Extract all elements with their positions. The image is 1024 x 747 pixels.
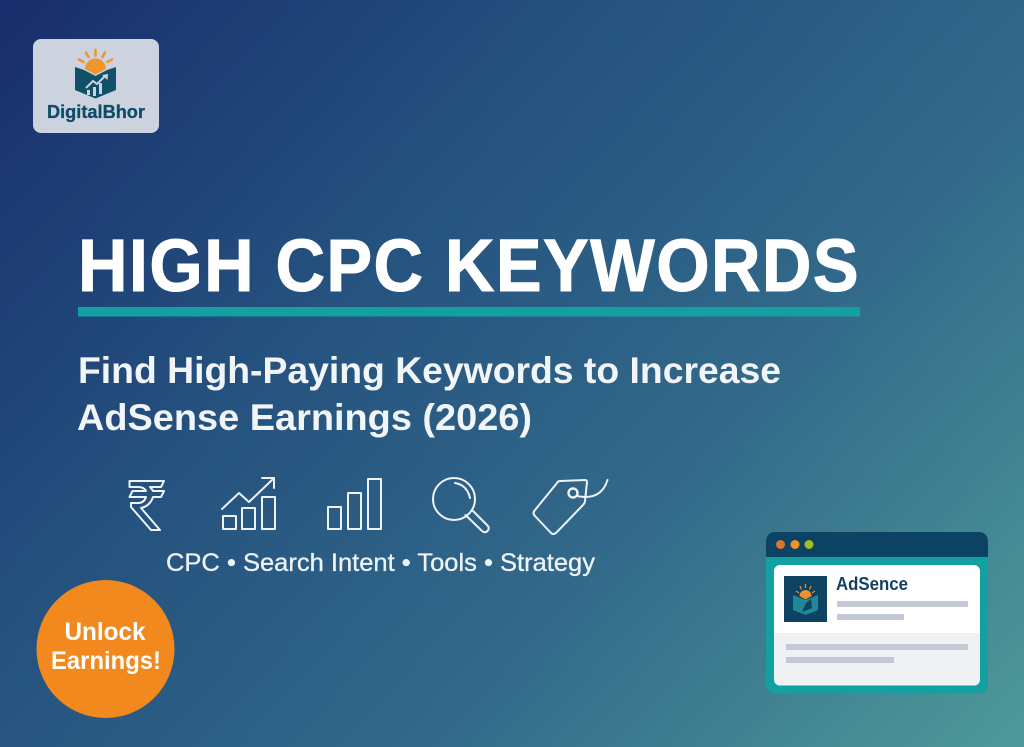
- icon: sun: [79, 50, 112, 74]
- icon: growth chart: [222, 478, 275, 529]
- icon captions: CPC • Search Intent • Tools • Strategy: [166, 549, 596, 577]
- window controls: [776, 540, 814, 549]
- badge: unlock earnings: [36, 580, 174, 718]
- card heading: AdSence: [836, 574, 908, 594]
- subtitle: Find High-Paying Keywords to Increase: [78, 350, 781, 391]
- browser window: AdSence: [766, 532, 988, 694]
- badge: unlock earnings: Unlock: [64, 618, 146, 646]
- logo wordmark: DigitalBhor: [47, 102, 145, 122]
- browser title bar: [766, 532, 988, 557]
- placeholder lines: [786, 601, 968, 663]
- icon: magnifying glass: [433, 478, 489, 532]
- mini logo: [784, 576, 827, 622]
- title underline: [78, 307, 860, 316]
- logo badge: DigitalBhor: [33, 39, 159, 133]
- browser frame: [766, 532, 988, 694]
- subtitle: [77, 350, 781, 438]
- icon: open book with chart: [75, 67, 116, 98]
- icon: rupee: [130, 481, 164, 530]
- icon row: [130, 478, 608, 534]
- icon: bar chart: [328, 479, 381, 529]
- content card: [774, 565, 980, 686]
- icon: price tag: [534, 480, 608, 534]
- title: HIGH CPC KEYWORDS: [78, 224, 860, 307]
- badge: unlock earnings: Earnings!: [51, 647, 161, 675]
- subtitle: AdSense Earnings (2026): [77, 397, 532, 438]
